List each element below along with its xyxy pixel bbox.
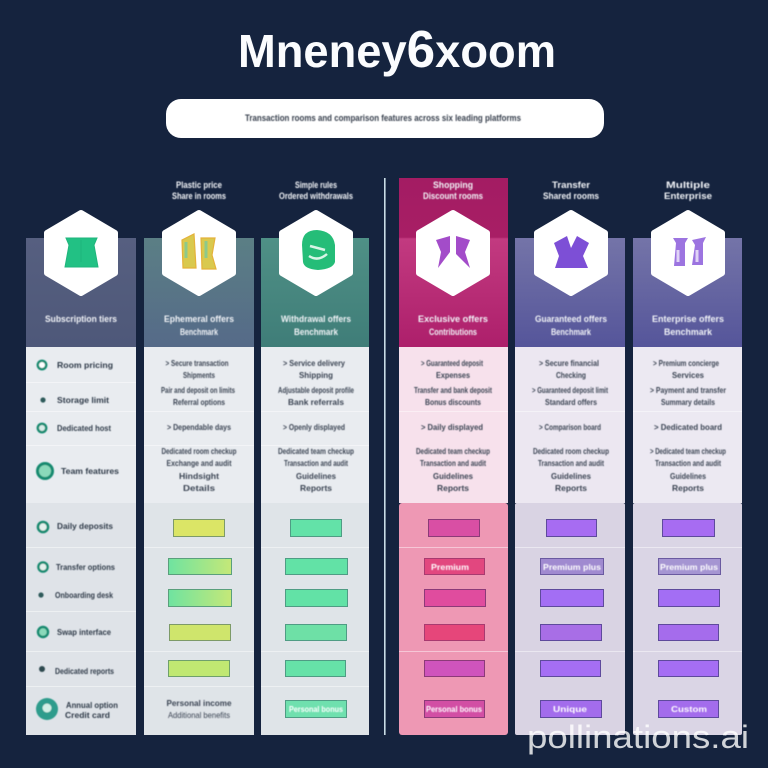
feature text: Transaction and audit (655, 458, 721, 468)
feature text: > Service delivery (283, 358, 345, 368)
subtitle pill (166, 99, 604, 138)
column label: Ephemeral offers (164, 314, 234, 325)
feature text: Hindsight (179, 471, 219, 481)
panel: column 2 (144, 180, 254, 735)
panel: column 6 (633, 180, 742, 735)
feature text: Standard offers (545, 397, 597, 407)
top label: Shopping (433, 180, 473, 191)
bars: Premium (431, 562, 469, 572)
row labels with markers: Credit card (65, 710, 110, 720)
hexagon and icon: purple vest (537, 213, 605, 293)
bars: Custom (671, 704, 708, 714)
feature text: Dedicated team checkup (416, 446, 490, 456)
top label: Share in rooms (172, 191, 226, 202)
feature text (650, 358, 727, 493)
top label (423, 180, 483, 202)
bottom text: Additional benefits (168, 710, 230, 720)
hexagon and icon: green badge (282, 213, 350, 293)
feature text: Checking (556, 370, 586, 380)
feature text: Dedicated room checkup (533, 446, 609, 456)
top label: Multiple (666, 180, 710, 191)
panel: label column (26, 213, 136, 735)
feature text: > Dedicated team checkup (650, 446, 726, 456)
bars: Personal bonus (426, 704, 482, 714)
column label: Benchmark (664, 327, 713, 338)
top label: Plastic price (176, 180, 222, 191)
feature text: Bank referrals (288, 397, 344, 407)
bars: Unique (553, 704, 587, 714)
bars (286, 520, 348, 718)
feature text: > Payment and transfer (650, 385, 727, 395)
column label: Enterprise offers (652, 314, 724, 325)
feature text: Guidelines (433, 471, 473, 481)
feature text: > Premium concierge (653, 358, 719, 368)
feature text: Referral options (173, 397, 225, 407)
top label (279, 180, 353, 202)
column label: Withdrawal offers (281, 314, 351, 325)
feature text: Guidelines (296, 471, 336, 481)
row labels with markers: Storage limit (57, 395, 109, 405)
title: Mneney6xoom (238, 21, 556, 79)
feature text: > Dependable days (167, 422, 231, 432)
row labels with markers: Team features (61, 466, 119, 476)
top label: Ordered withdrawals (279, 191, 353, 202)
row labels with markers: Room pricing (57, 360, 113, 370)
hexagon and icon: purple pillars (654, 213, 722, 293)
row labels with markers: Annual option (66, 700, 118, 710)
feature text: Summary details (661, 397, 715, 407)
top label (543, 180, 599, 202)
row labels with markers: Swap interface (57, 627, 111, 637)
feature text: Details (183, 483, 215, 493)
column label (535, 314, 607, 338)
watermark: pollinations.ai (527, 719, 749, 755)
column label: Exclusive offers (418, 314, 488, 325)
subtitle pill: Transaction rooms and comparison features across six leading platforms (245, 113, 521, 123)
column label: Benchmark (551, 327, 592, 338)
top label (664, 180, 712, 202)
bars: Premium plus (543, 562, 601, 572)
feature text: Transaction and audit (420, 458, 486, 468)
feature text: > Openly displayed (283, 422, 345, 432)
panel: column 5 (515, 180, 625, 735)
feature text: > Guaranteed deposit (421, 358, 483, 368)
feature text: Guidelines (551, 471, 591, 481)
feature text: > Daily displayed (421, 422, 483, 432)
column label: Contributions (429, 327, 477, 338)
top label: Discount rooms (423, 191, 483, 202)
column label: Benchmark (294, 327, 339, 338)
feature text: Reports (555, 483, 587, 493)
feature text: Transfer and bank deposit (414, 385, 492, 395)
feature text: Adjustable deposit profile (278, 385, 354, 395)
top label: Simple rules (295, 180, 337, 191)
feature text: Transaction and audit (284, 458, 348, 468)
feature text: Transaction and audit (538, 458, 604, 468)
column label: Benchmark (180, 327, 219, 338)
top label: Enterprise (664, 191, 712, 202)
row labels with markers: Dedicated host (57, 423, 111, 433)
hexagon and icon: green box (47, 213, 115, 293)
column label (164, 314, 234, 338)
feature text: > Secure financial (539, 358, 599, 368)
row labels with markers: Dedicated reports (55, 666, 114, 676)
feature text: Bonus discounts (425, 397, 481, 407)
hexagon and icon: yellow boots (165, 213, 233, 293)
feature text: Pair and deposit on limits (161, 385, 235, 395)
centre divider (384, 178, 386, 735)
feature text (278, 358, 354, 493)
bars (540, 520, 604, 718)
feature text: Dedicated room checkup (162, 446, 236, 456)
top label: Shared rooms (543, 191, 599, 202)
panel: column 4 highlighted (399, 178, 508, 735)
feature text: Exchange and audit (166, 458, 232, 468)
feature text (161, 358, 236, 493)
feature text: Services (672, 370, 704, 380)
bars: Personal bonus (289, 704, 343, 714)
feature text: Shipping (299, 370, 333, 380)
feature text: Reports (672, 483, 704, 493)
feature text (414, 358, 492, 493)
column label: Guaranteed offers (535, 314, 607, 325)
row labels with markers (36, 360, 119, 720)
row labels with markers: Daily deposits (57, 521, 113, 531)
bottom text (166, 698, 232, 720)
hexagon and icon: purple butterfly (419, 213, 487, 293)
row labels with markers: Onboarding desk (55, 590, 113, 600)
feature text: Reports (437, 483, 469, 493)
top label: Transfer (552, 180, 590, 191)
column label (418, 314, 488, 338)
row labels with markers: Transfer options (56, 562, 115, 572)
panel: column 3 (261, 180, 369, 735)
feature text (532, 358, 609, 493)
feature text: Guidelines (670, 471, 706, 481)
feature text: > Guaranteed deposit limit (532, 385, 608, 395)
feature text: > Dedicated board (654, 422, 722, 432)
column label: Subscription tiers (45, 314, 117, 325)
feature text: Shipments (183, 370, 215, 380)
feature text: Reports (300, 483, 332, 493)
bars (168, 520, 232, 676)
column label (652, 314, 724, 338)
bars (658, 520, 720, 718)
column label (281, 314, 351, 338)
bars: Premium plus (660, 562, 718, 572)
bottom text: Personal income (166, 698, 232, 708)
top label (172, 180, 226, 202)
feature text: Dedicated team checkup (278, 446, 354, 456)
feature text: > Comparison board (539, 422, 601, 432)
feature text: > Secure transaction (166, 358, 228, 368)
feature text: Expenses (436, 370, 470, 380)
bars (424, 520, 486, 718)
